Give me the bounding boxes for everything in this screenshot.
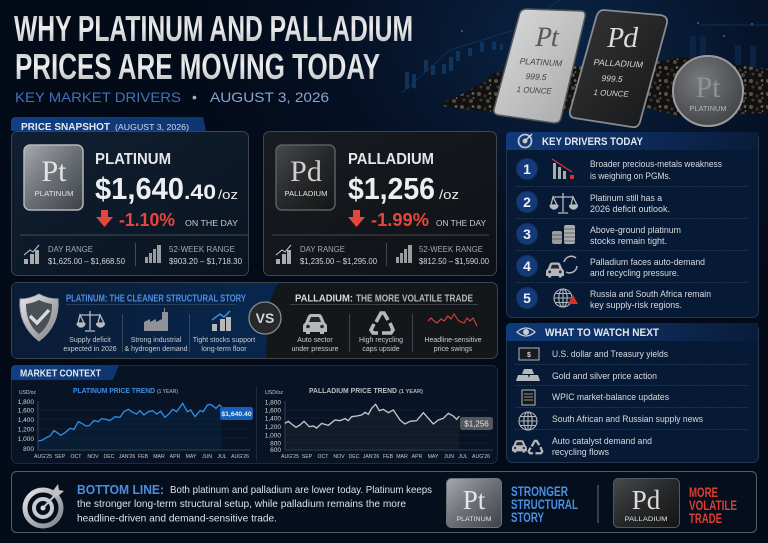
platinum point: supply deficit <box>63 311 117 353</box>
palladium bar: PALLADIUM <box>593 57 644 70</box>
palladium point: price swings <box>424 314 482 353</box>
chart: palladium price trend: 1,800 <box>265 400 281 406</box>
tab: market context: MARKET CONTEXT <box>20 368 101 380</box>
platinum point: tight stocks <box>193 311 255 353</box>
stronger structural story: STORY <box>511 510 544 525</box>
tile: Pt: Pt <box>463 485 486 515</box>
tile: Pt: PLATINUM <box>456 516 492 523</box>
value badge <box>460 417 493 430</box>
change <box>348 210 486 230</box>
driver 1: 1 <box>523 161 531 177</box>
platinum bar: 999.5 <box>524 71 548 82</box>
chart: palladium price trend: NOV <box>333 454 345 460</box>
platinum point: supply deficit: expected in 2026 <box>63 346 117 353</box>
driver 3: 3 <box>523 226 531 242</box>
day range: DAY RANGE <box>300 244 345 254</box>
vs badge: VS <box>256 310 274 326</box>
palladium bar: 1 OUNCE <box>593 88 630 99</box>
panel: what to watch next <box>506 323 758 462</box>
metal rubble pile <box>440 57 768 116</box>
tile: Pt <box>446 478 502 528</box>
watch: supply news: South African and Russian supply news <box>552 414 703 425</box>
chart: platinum price trend: OCT <box>71 454 82 460</box>
watch: auto catalyst: recycling flows <box>552 447 609 458</box>
panel: platinum price <box>11 117 248 276</box>
tile: Pd <box>276 145 335 210</box>
watch: gold and silver <box>516 369 657 382</box>
price: $1,256 <box>348 171 435 206</box>
chart: palladium price trend: DEC <box>349 454 360 460</box>
chart: platinum price trend: JUL <box>217 454 227 460</box>
change: -1.99% <box>371 210 429 230</box>
panel: key drivers today <box>506 132 758 318</box>
watch: auto catalyst: Auto catalyst demand and <box>552 436 652 447</box>
palladium point: auto sector: Auto sector <box>297 337 333 344</box>
value badge: $1,640.40 <box>221 411 252 418</box>
bottom line text: Both platinum and palladium are lower today. Platinum keeps <box>170 484 432 496</box>
palladium point: recycling <box>359 313 403 353</box>
driver 2: Platinum still has a <box>590 193 663 204</box>
header: WHAT TO WATCH NEXT <box>545 327 659 339</box>
shield icon <box>20 294 58 341</box>
platinum bar: PLATINUM <box>518 56 564 68</box>
chart: platinum price trend: AUG'25 <box>34 454 52 460</box>
driver 1: is weighing on PGMs. <box>590 171 671 182</box>
platinum bar: 1 OUNCE <box>515 85 553 96</box>
price: .40 <box>184 181 216 204</box>
panel: market context <box>11 365 498 464</box>
tab: price snapshot: (AUGUST 3, 2026) <box>115 122 189 132</box>
platinum point: industrial demand: & hydrogen demand <box>124 346 188 353</box>
bottom line text <box>77 482 432 524</box>
chart: palladium price trend: MAY <box>428 454 439 460</box>
watch: dollar <box>519 348 668 360</box>
stronger structural story: STRUCTURAL <box>511 497 578 512</box>
chart: platinum price trend: AUG'26 <box>231 454 249 460</box>
chart: platinum price trend: 1,400 <box>18 417 34 424</box>
chart: platinum price trend: JUN <box>202 454 212 460</box>
hero image: metal bars and coin <box>440 9 768 127</box>
panel: palladium price <box>264 132 496 276</box>
watch: dollar: U.S. dollar and Treasury yields <box>552 349 668 360</box>
driver 1: Broader precious-metals weakness <box>590 159 722 170</box>
stronger structural story: STRONGER <box>511 484 568 499</box>
tile: Pd: PALLADIUM <box>624 516 668 523</box>
title: PRICES ARE MOVING TODAY <box>15 46 380 87</box>
chart: platinum price trend <box>18 386 253 460</box>
palladium point: auto sector <box>291 314 339 353</box>
driver 1 <box>516 158 722 182</box>
tile: Pd: Pd <box>290 155 322 188</box>
header <box>506 132 758 150</box>
driver 2: 2 <box>523 194 531 210</box>
palladium point: auto sector: under pressure <box>291 346 339 353</box>
chart: palladium price trend: JAN'26 <box>363 454 379 460</box>
palladium point: price swings: price swings <box>434 346 473 353</box>
driver 5: 5 <box>523 290 531 306</box>
subtitle: KEY MARKET DRIVERS <box>15 89 181 105</box>
chart: palladium price trend <box>265 386 493 460</box>
tile: Pt <box>24 145 83 210</box>
chart: platinum price trend: 1,200 <box>18 426 34 434</box>
day range <box>276 244 377 266</box>
chart: palladium price trend: AUG'26 <box>472 454 490 460</box>
driver 2: 2026 deficit outlook. <box>590 204 670 215</box>
tile: Pd: Pd <box>632 485 661 515</box>
driver 4: and recycling pressure. <box>590 268 679 279</box>
chart: palladium price trend: PALLADIUM PRICE TREND <box>309 386 398 395</box>
subtitle <box>15 89 329 105</box>
panel: platinum versus palladium <box>12 282 498 358</box>
chart: palladium price trend: 800 <box>270 440 281 448</box>
chart: palladium price trend: AUG'25 <box>281 454 299 460</box>
background candlestick chart <box>402 0 768 93</box>
52-week range: 52-WEEK RANGE <box>419 244 483 254</box>
palladium point: recycling: High recycling <box>359 337 403 344</box>
watch: WPIC updates: WPIC market-balance updates <box>552 392 669 403</box>
palladium heading <box>295 292 473 304</box>
palladium point: recycling: caps upside <box>362 346 400 353</box>
chart: platinum price trend: JAN'26 <box>119 454 135 460</box>
driver 5: key supply-risk regions. <box>590 300 682 311</box>
bottom line text: headline-driven and demand-sensitive trade. <box>77 512 277 524</box>
chart: platinum price trend: 800 <box>23 446 34 453</box>
palladium bar: 999.5 <box>601 73 624 84</box>
name: PLATINUM <box>95 151 171 168</box>
panel: bottom line <box>12 472 756 532</box>
value badge <box>220 407 253 420</box>
chart: palladium price trend: FEB <box>383 454 394 460</box>
chart: platinum price trend: NOV <box>87 454 99 460</box>
change: -1.10% <box>119 210 175 230</box>
chart: palladium price trend: 1,600 <box>265 408 281 414</box>
chart: palladium price trend: OCT <box>318 454 329 460</box>
watch: auto catalyst <box>512 436 652 458</box>
platinum heading: PLATINUM: THE CLEANER STRUCTURAL STORY <box>66 292 246 304</box>
header <box>506 323 758 341</box>
chart: palladium price trend: 1,200 <box>265 424 281 431</box>
chart: platinum price trend: 1,000 <box>18 436 34 443</box>
watch: supply news <box>519 412 703 430</box>
subtitle: AUGUST 3, 2026 <box>210 89 329 105</box>
day range: DAY RANGE <box>48 244 93 254</box>
stronger structural story <box>511 484 578 525</box>
52-week range <box>145 244 242 266</box>
52-week range <box>396 244 489 266</box>
palladium heading: THE MORE VOLATILE TRADE <box>356 292 473 304</box>
palladium heading: PALLADIUM: <box>295 292 353 304</box>
value badge: $1,256 <box>464 420 489 428</box>
chart: palladium price trend: MAR <box>396 454 408 460</box>
change: ON THE DAY <box>436 218 486 228</box>
more volatile trade: MORE <box>689 485 718 500</box>
palladium point: price swings: Headline-sensitive <box>424 337 482 344</box>
price: /oz <box>218 187 238 202</box>
platinum point: supply deficit: Supply deficit <box>69 337 111 344</box>
chart: palladium price trend: 1,000 <box>265 432 281 440</box>
driver 4 <box>516 256 705 279</box>
chart: platinum price trend: FEB <box>138 454 149 460</box>
chart: palladium price trend: (1 YEAR) <box>399 389 423 395</box>
driver 5 <box>516 288 711 311</box>
chart: platinum price trend: USD/oz <box>19 390 36 396</box>
tile: Pt: Pt <box>41 155 67 188</box>
platinum bar: Pt <box>533 22 563 53</box>
day range <box>24 244 125 266</box>
driver 3 <box>516 224 681 247</box>
palladium bar <box>570 10 667 127</box>
driver 4: 4 <box>523 258 531 274</box>
platinum point: tight stocks: long-term floor <box>201 346 247 353</box>
chart: platinum price trend: MAY <box>186 454 197 460</box>
tab: price snapshot: PRICE SNAPSHOT <box>21 122 110 133</box>
platinum point: tight stocks: Tight stocks support <box>193 337 255 344</box>
driver 3: stocks remain tight. <box>590 236 667 247</box>
platinum coin: Pt <box>695 71 721 104</box>
subtitle: • <box>192 89 197 105</box>
chart: palladium price trend: 1,400 <box>265 416 281 422</box>
chart: palladium price trend: JUL <box>458 454 468 460</box>
palladium bar: Pd <box>605 22 641 54</box>
day range: $1,235.00 – $1,295.00 <box>300 256 377 266</box>
driver 2 <box>516 192 670 215</box>
platinum bar <box>494 9 585 123</box>
vs badge <box>249 302 281 334</box>
bottom line text: BOTTOM LINE: <box>77 482 164 497</box>
platinum point: industrial demand: Strong industrial <box>131 337 182 344</box>
chart: platinum price trend: (1 YEAR) <box>157 389 178 395</box>
platinum coin <box>673 56 743 126</box>
price: /oz <box>439 187 459 202</box>
tile: Pt: PLATINUM <box>34 189 74 198</box>
driver 5: Russia and South Africa remain <box>590 289 711 300</box>
tile: Pd: PALLADIUM <box>284 189 328 198</box>
52-week range: 52-WEEK RANGE <box>169 244 235 254</box>
chart: platinum price trend: SEP <box>55 454 66 460</box>
chart: platinum price trend: DEC <box>104 454 115 460</box>
price <box>95 171 238 206</box>
watch: gold and silver: Gold and silver price action <box>552 371 657 382</box>
platinum coin: PLATINUM <box>689 104 727 113</box>
chart: platinum price trend: PLATINUM PRICE TREND <box>73 386 156 395</box>
watch: dollar: $ <box>527 352 531 359</box>
day range: $1,625.00 – $1,668.50 <box>48 256 125 266</box>
icon: target <box>25 484 64 526</box>
watch: WPIC updates <box>522 390 669 405</box>
chart: palladium price trend: USD/oz <box>265 390 283 396</box>
chart: palladium price trend: SEP <box>302 454 313 460</box>
platinum point: industrial demand <box>124 308 188 353</box>
change <box>96 210 238 230</box>
chart: platinum price trend: 1,600 <box>18 408 34 414</box>
52-week range: $903.20 – $1,718.30 <box>169 256 242 266</box>
more volatile trade: VOLATILE <box>689 498 737 513</box>
chart: platinum price trend: MAR <box>153 454 165 460</box>
driver 4: Palladium faces auto-demand <box>590 257 705 268</box>
chart: palladium price trend: APR <box>412 454 423 460</box>
chart: platinum price trend: 1,800 <box>18 399 34 406</box>
more volatile trade <box>689 485 737 526</box>
chart: platinum price trend: APR <box>170 454 181 460</box>
title <box>14 8 413 87</box>
bottom line text: the stronger long-term structural setup, while palladium remains the more <box>77 498 406 510</box>
change: ON THE DAY <box>185 218 238 228</box>
52-week range: $812.50 – $1,590.00 <box>419 256 489 266</box>
chart: palladium price trend: JUN <box>444 454 454 460</box>
driver 3: Above-ground platinum <box>590 225 681 236</box>
tab: price snapshot <box>11 117 206 136</box>
chart: palladium price trend: 600 <box>270 447 281 454</box>
tile: Pd <box>614 478 680 528</box>
title: WHY PLATINUM AND PALLADIUM <box>14 8 413 49</box>
header: KEY DRIVERS TODAY <box>542 136 644 148</box>
name: PALLADIUM <box>348 151 434 168</box>
more volatile trade: TRADE <box>689 511 722 526</box>
price: $1,640 <box>95 171 184 206</box>
